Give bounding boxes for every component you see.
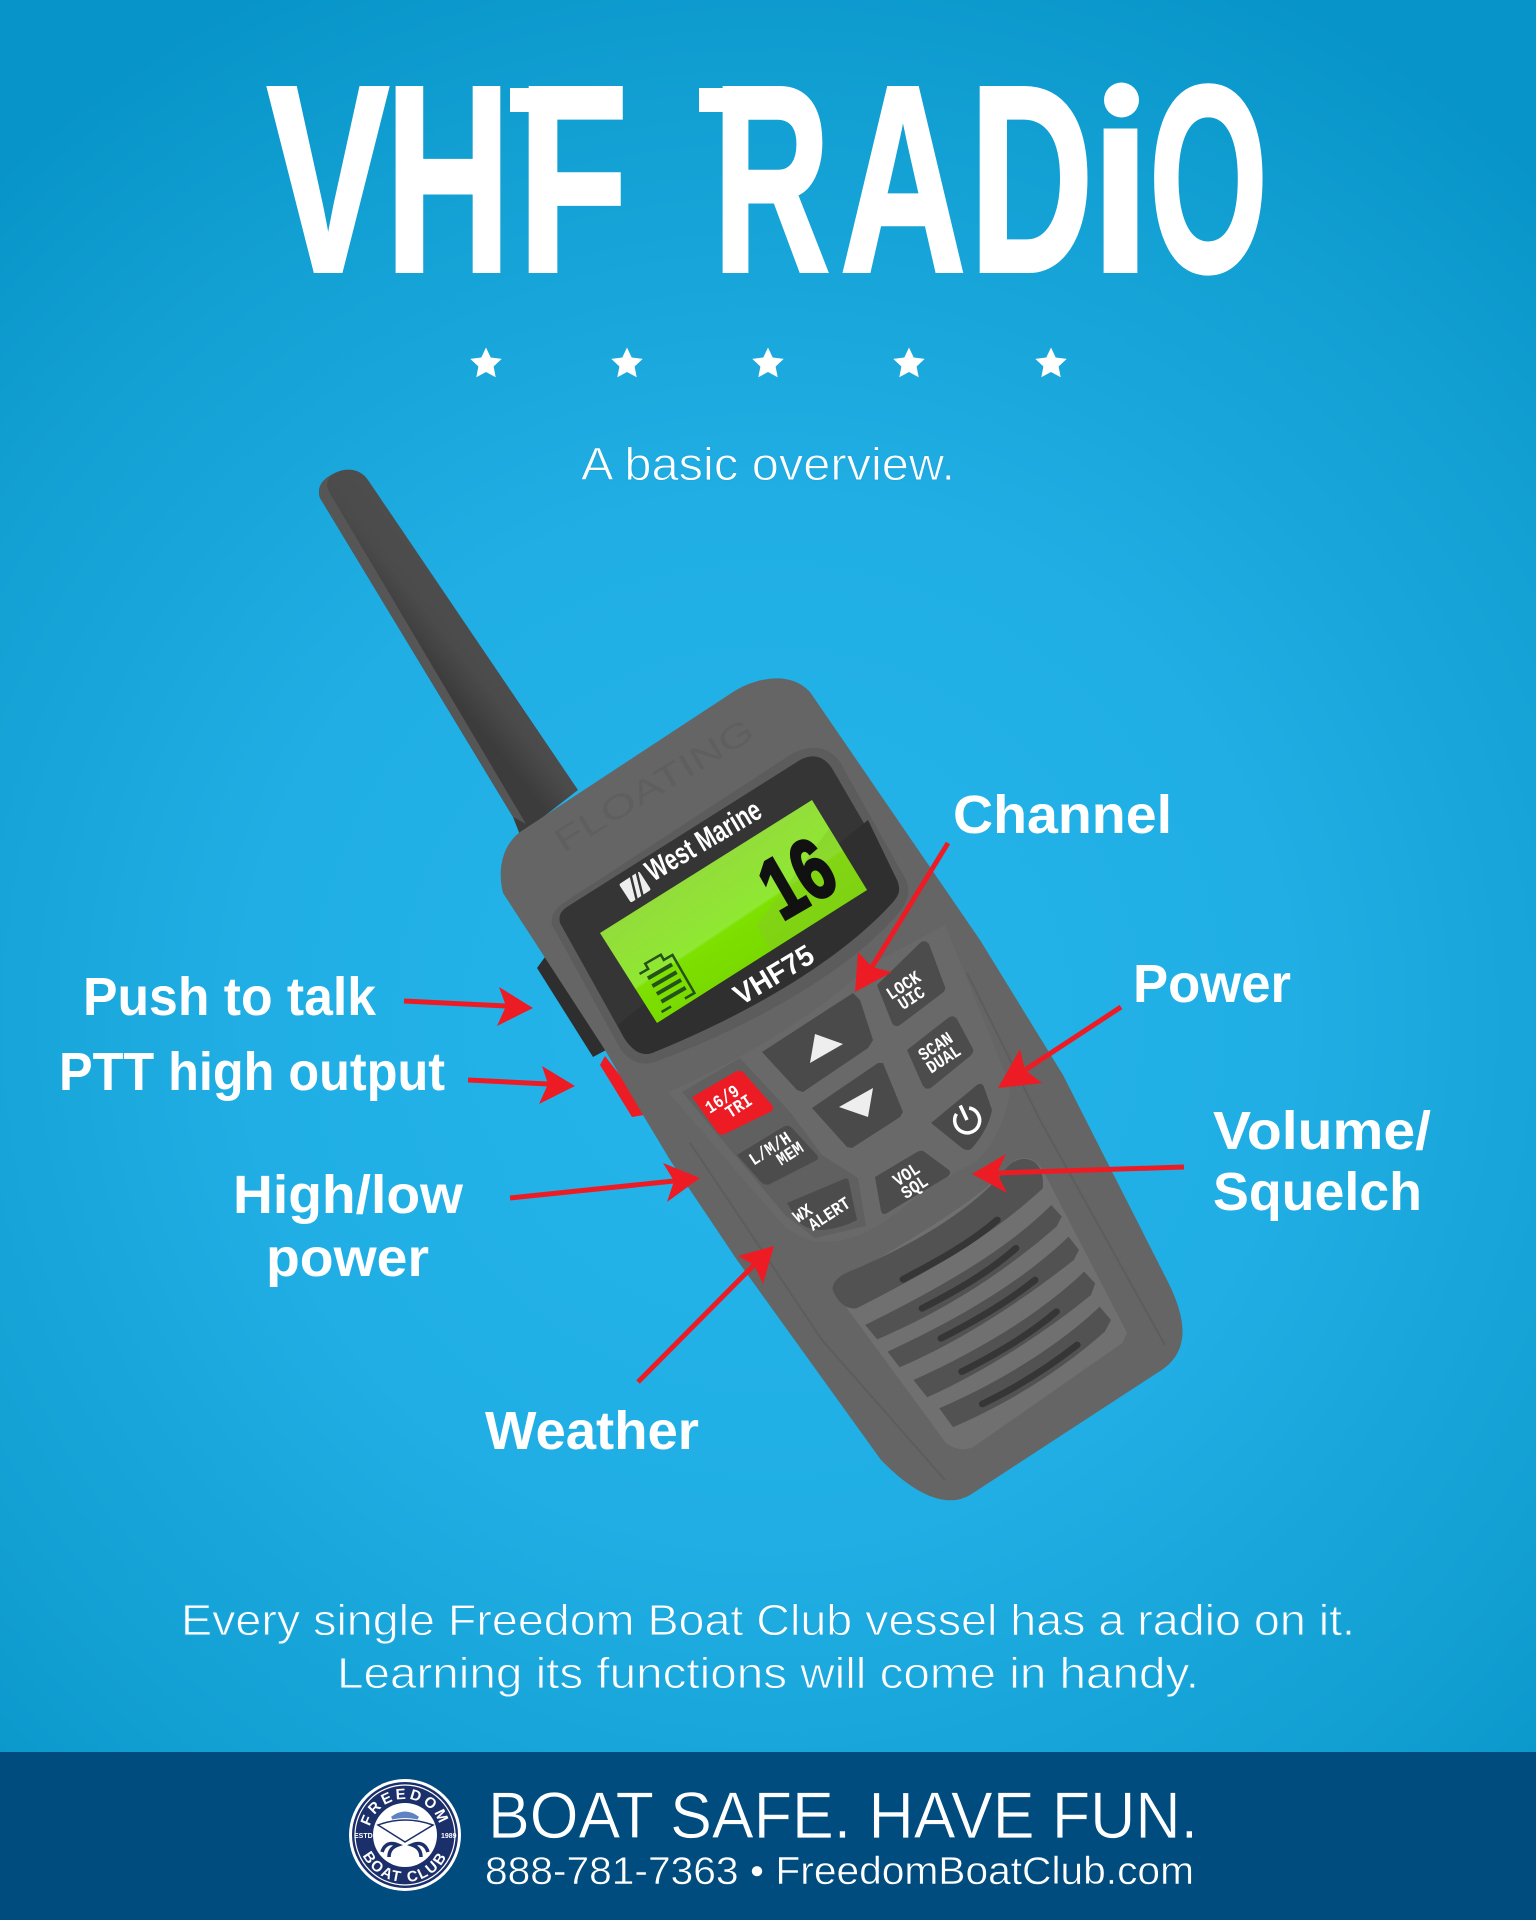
- button WX ALERT: [787, 1178, 857, 1241]
- title: i: [1090, 31, 1151, 328]
- button panel highlight: [668, 925, 1010, 1242]
- title: [266, 82, 1263, 276]
- arrow: push to talk: [404, 987, 533, 1026]
- side button: push to talk: [537, 957, 606, 1057]
- button WX ALERT: ALERT: [805, 1194, 855, 1236]
- battery icon: [637, 950, 694, 1012]
- club logo: [349, 1779, 461, 1891]
- West Marine wordmark: West Marine: [640, 794, 767, 888]
- label: High/low power: High/low: [233, 1165, 464, 1225]
- VHF75 model: VHF75: [728, 939, 820, 1012]
- West Marine logo mark: [618, 870, 652, 904]
- closing text: Every single Freedom Boat Club vessel has a radio on it.: [181, 1596, 1355, 1645]
- label: High/low power: power: [266, 1228, 429, 1288]
- embossed FLOATING: FLOATING: [548, 711, 760, 859]
- channel number: 16: [744, 820, 851, 937]
- button 16/9 TRI: TRI: [722, 1092, 757, 1124]
- button L/M/H MEM: L/M/H: [746, 1129, 796, 1171]
- button VOL SQL: VOL: [890, 1160, 924, 1192]
- button WX ALERT: WX: [790, 1201, 817, 1228]
- button power: [931, 1084, 992, 1150]
- title: H: [385, 31, 511, 328]
- speaker grille: [832, 1158, 1127, 1449]
- label: Volume/Squelch: Volume/: [1213, 1101, 1431, 1161]
- button LOCK UIC: UIC: [895, 983, 930, 1015]
- arrow: volume squelch: [972, 1154, 1184, 1193]
- antenna: [319, 470, 578, 835]
- button L/M/H MEM: MEM: [774, 1139, 808, 1171]
- star row: [470, 348, 1067, 377]
- button VOL SQL: [875, 1151, 950, 1214]
- button 16/9 TRI: 16/9: [702, 1082, 744, 1119]
- footer band: [0, 1752, 1536, 1920]
- button down: [812, 1063, 903, 1148]
- arrow: weather: [638, 1246, 774, 1382]
- label: Power: Power: [1133, 954, 1291, 1014]
- title: D: [970, 31, 1093, 328]
- button 16/9 TRI: [692, 1071, 773, 1135]
- arrow: channel: [855, 843, 948, 992]
- label: High/low power: [233, 1165, 464, 1288]
- LCD display: [600, 800, 867, 1023]
- title: O: [1149, 31, 1268, 328]
- button SCAN DUAL: [907, 1016, 973, 1089]
- closing text: Learning its functions will come in handy.: [337, 1649, 1199, 1698]
- left button slot: [682, 1058, 866, 1238]
- club logo: BOAT CLUB: [362, 1850, 445, 1882]
- arrow: PTT high output: [468, 1066, 575, 1104]
- button up: [762, 993, 873, 1092]
- title: A: [840, 31, 966, 328]
- button LOCK UIC: [877, 941, 945, 1026]
- screen bezel outer: [552, 748, 908, 1064]
- tagline: BOAT SAFE. HAVE FUN.: [488, 1778, 1198, 1852]
- screen bezel dark: [559, 756, 899, 1054]
- button SCAN DUAL: DUAL: [923, 1042, 965, 1079]
- title: R: [713, 31, 830, 328]
- contact line: 888-781-7363 • FreedomBoatClub.com: [485, 1850, 1194, 1893]
- club logo: ESTD: [354, 1833, 373, 1840]
- label: Volume/Squelch: Squelch: [1213, 1162, 1422, 1222]
- button VOL SQL: SQL: [898, 1172, 933, 1204]
- side button: PTT high output: [600, 1056, 650, 1117]
- label: PTT high output: PTT high output: [59, 1042, 445, 1102]
- label: Push to talk: Push to talk: [83, 967, 377, 1027]
- arrow: high low power: [510, 1163, 700, 1202]
- radio body: [501, 678, 1183, 1500]
- bezel lower band: [618, 820, 899, 1054]
- label: Volume/Squelch: [1213, 1101, 1431, 1222]
- arrow: power: [998, 1007, 1121, 1088]
- subtitle: A basic overview.: [581, 438, 955, 490]
- club logo: FREEDOM: [360, 1788, 448, 1826]
- button SCAN DUAL: SCAN: [915, 1029, 957, 1066]
- title: V: [267, 31, 390, 328]
- button L/M/H MEM: [737, 1126, 818, 1185]
- club logo: 1989: [441, 1833, 457, 1840]
- title: F: [518, 31, 628, 328]
- body edge lines: [690, 973, 1165, 1480]
- closing text: [181, 1596, 1355, 1698]
- radio illustration: [319, 470, 1183, 1500]
- label: Channel: Channel: [953, 785, 1172, 845]
- label: Weather: Weather: [485, 1401, 699, 1461]
- button LOCK UIC: LOCK: [883, 968, 925, 1005]
